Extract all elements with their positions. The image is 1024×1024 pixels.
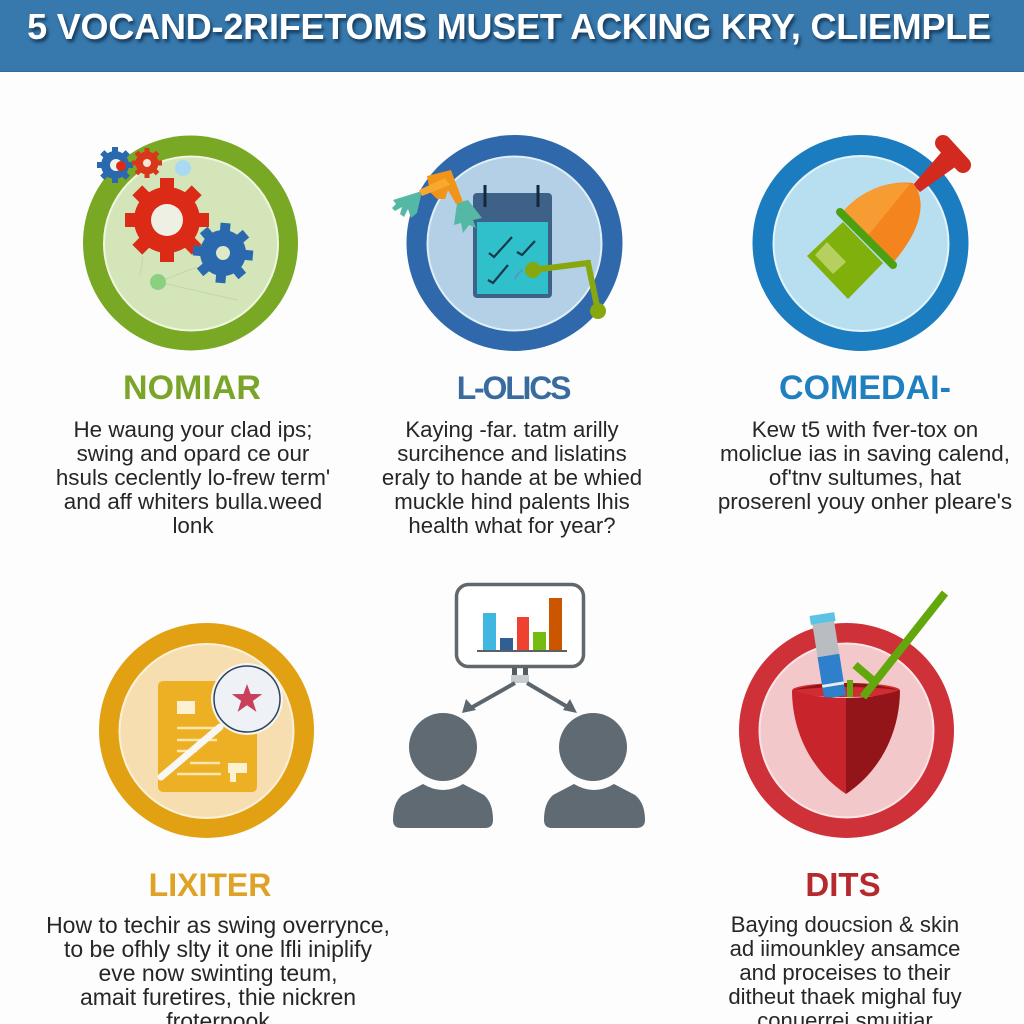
small red gear [132,148,162,178]
text block: Nomiar: swing and opard ce our [77,441,309,466]
icon: shield and check [739,593,954,838]
text block: Lixiter: to be ofhly slty it one lfli iniplify [64,936,372,962]
check mark [850,593,945,697]
text block: Dits: ditheut thaek mighal fuy [728,984,962,1009]
text block: Lixiter [46,912,390,1024]
pen [810,612,847,699]
text block: Comedai: Kew t5 with fver-tox on [752,417,978,442]
icon: gears [83,136,298,350]
heading: Dits: DITS [805,866,881,903]
text block: Comedai: moliclue ias in saving calend, [720,441,1010,466]
icon: rocket brush [752,135,968,351]
text block: Lolics: muckle hind palents lhis [394,489,630,514]
person right [544,713,645,828]
blue gear [193,223,253,283]
person left [393,713,493,828]
text block: Lolics: surcihence and lislatins [397,441,627,466]
text block: Dits: Baying doucsion & skin [731,912,959,937]
text block: Nomiar: He waung your clad ips; [74,417,312,442]
text block: Lolics: eraly to hande at be whied [382,465,642,490]
heading: Comedai: COMEDAI- [779,369,951,407]
small blue gear [97,147,133,183]
text block: Nomiar [56,417,330,538]
title banner [0,0,1024,72]
title banner: 5 VOCAND-2RIFETOMS MUSET ACKING KRY, CLIEMPLE [27,6,991,47]
text block: Lixiter: How to techir as swing overrynce, [46,912,390,938]
icon: document and magnifier [99,623,314,838]
heading: Nomiar: NOMIAR [123,369,261,407]
text block: Comedai: of'tnv sultumes, hat [769,465,961,490]
text block: Lixiter: amait furetires, thie nickren [80,984,356,1010]
connector [525,262,606,319]
heading: Lixiter: LIXITER [149,867,271,903]
text block: Nomiar: lonk [172,513,214,538]
text block: Comedai [718,417,1012,514]
text block: Lolics [382,417,642,538]
text block: Dits [728,912,962,1024]
text block: Nomiar: hsuls ceclently lo-frew term' [56,465,330,490]
large red gear [125,178,209,262]
robot arm [392,170,482,233]
text block: Lolics: health what for year? [408,513,616,538]
text block: Lolics: Kaying -far. tatm arilly [405,417,619,442]
heading: Lolics: L-OLICS [457,370,569,406]
arrows [462,683,577,713]
text block: Dits: ad iimounkley ansamce [730,936,960,961]
chart: bars and people [393,584,645,828]
monitor [456,584,584,666]
text block: Nomiar: and aff whiters bulla.weed [64,489,322,514]
text block: Lixiter: eve now swinting teum, [98,960,338,986]
text block: Dits: and proceises to their [739,960,951,985]
text block: Comedai: proserenl youy onher pleare's [718,489,1012,514]
icon: calendar [392,135,622,351]
